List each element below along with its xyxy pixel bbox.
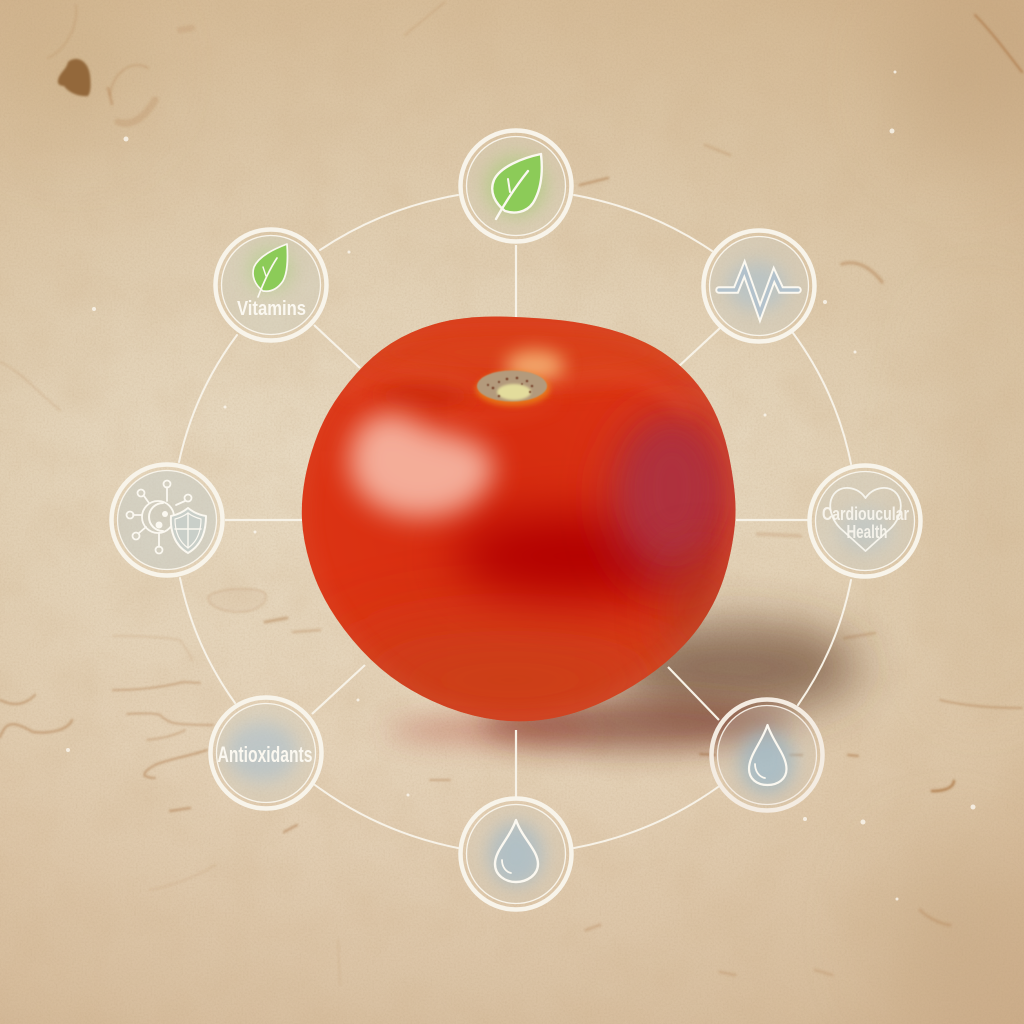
tomato [302,316,736,722]
stem glow [505,350,565,382]
node: pulse [704,230,814,342]
label: cardiovascular health: Cardioucular [822,504,909,524]
cast shadow of tomato [385,622,860,750]
label: antioxidants: Antioxidants [218,742,312,767]
icon: drop [495,820,538,882]
icon: virus and shield [126,480,206,554]
node: immunity [112,464,222,576]
top shoulder tone [350,322,690,382]
icon: leaf [492,154,542,219]
specular highlight [350,413,494,517]
stem scar [477,370,547,402]
label: cardiovascular health [822,504,909,542]
deep red core [455,514,705,598]
dust specks [66,70,976,900]
icon: heart [830,488,901,551]
node: water drop (bottom) [460,798,572,910]
node: leaf (top) [460,130,572,242]
icon: leaf [253,244,288,297]
outer rim [302,316,736,721]
connector ring arcs [179,195,851,848]
node: antioxidants [210,698,322,808]
label: cardiovascular health: Health [846,522,888,542]
cool reflection on right [614,414,730,582]
node: vitamins [216,230,326,340]
icon: drop [749,725,786,785]
node: cardiovascular health [810,466,920,576]
lower warm tone [354,627,658,722]
icon: heartbeat line [719,269,798,313]
shoulder ridges [356,371,464,392]
label: vitamins: Vitamins [237,298,306,320]
node: water drop (right) [712,700,822,810]
connector spokes [225,245,808,797]
